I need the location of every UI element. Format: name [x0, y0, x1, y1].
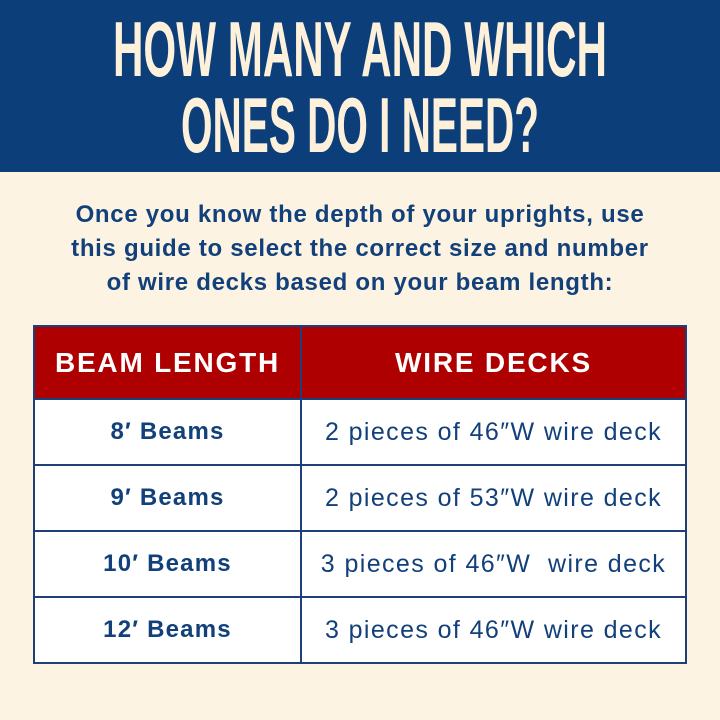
- intro text: of wire decks based on your beam length:: [107, 269, 613, 296]
- table: beam lengths and wire decks: 9′ Beams: [110, 484, 225, 511]
- intro text: Once you know the depth of your uprights, use: [76, 201, 644, 228]
- table: beam lengths and wire decks: 2 pieces of 53″W wire deck: [325, 484, 662, 512]
- title: [113, 5, 607, 169]
- table: beam lengths and wire decks: WIRE DECKS: [395, 346, 592, 378]
- intro text: [71, 201, 649, 296]
- table: beam lengths and wire decks: 8′ Beams: [110, 418, 225, 445]
- table: beam lengths and wire decks: 2 pieces of 46″W wire deck: [325, 418, 662, 446]
- table: beam lengths and wire decks: 12′ Beams: [103, 616, 232, 643]
- table: beam lengths and wire decks: 10′ Beams: [103, 550, 232, 577]
- table: beam lengths and wire decks: 3 pieces of 46″W wire deck: [321, 550, 666, 578]
- table: beam lengths and wire decks: 3 pieces of 46″W wire deck: [325, 616, 662, 644]
- intro text: this guide to select the correct size and number: [71, 235, 649, 262]
- table: beam lengths and wire decks: [33, 325, 687, 664]
- table: beam lengths and wire decks: BEAM LENGTH: [55, 346, 280, 378]
- header banner: [0, 0, 720, 172]
